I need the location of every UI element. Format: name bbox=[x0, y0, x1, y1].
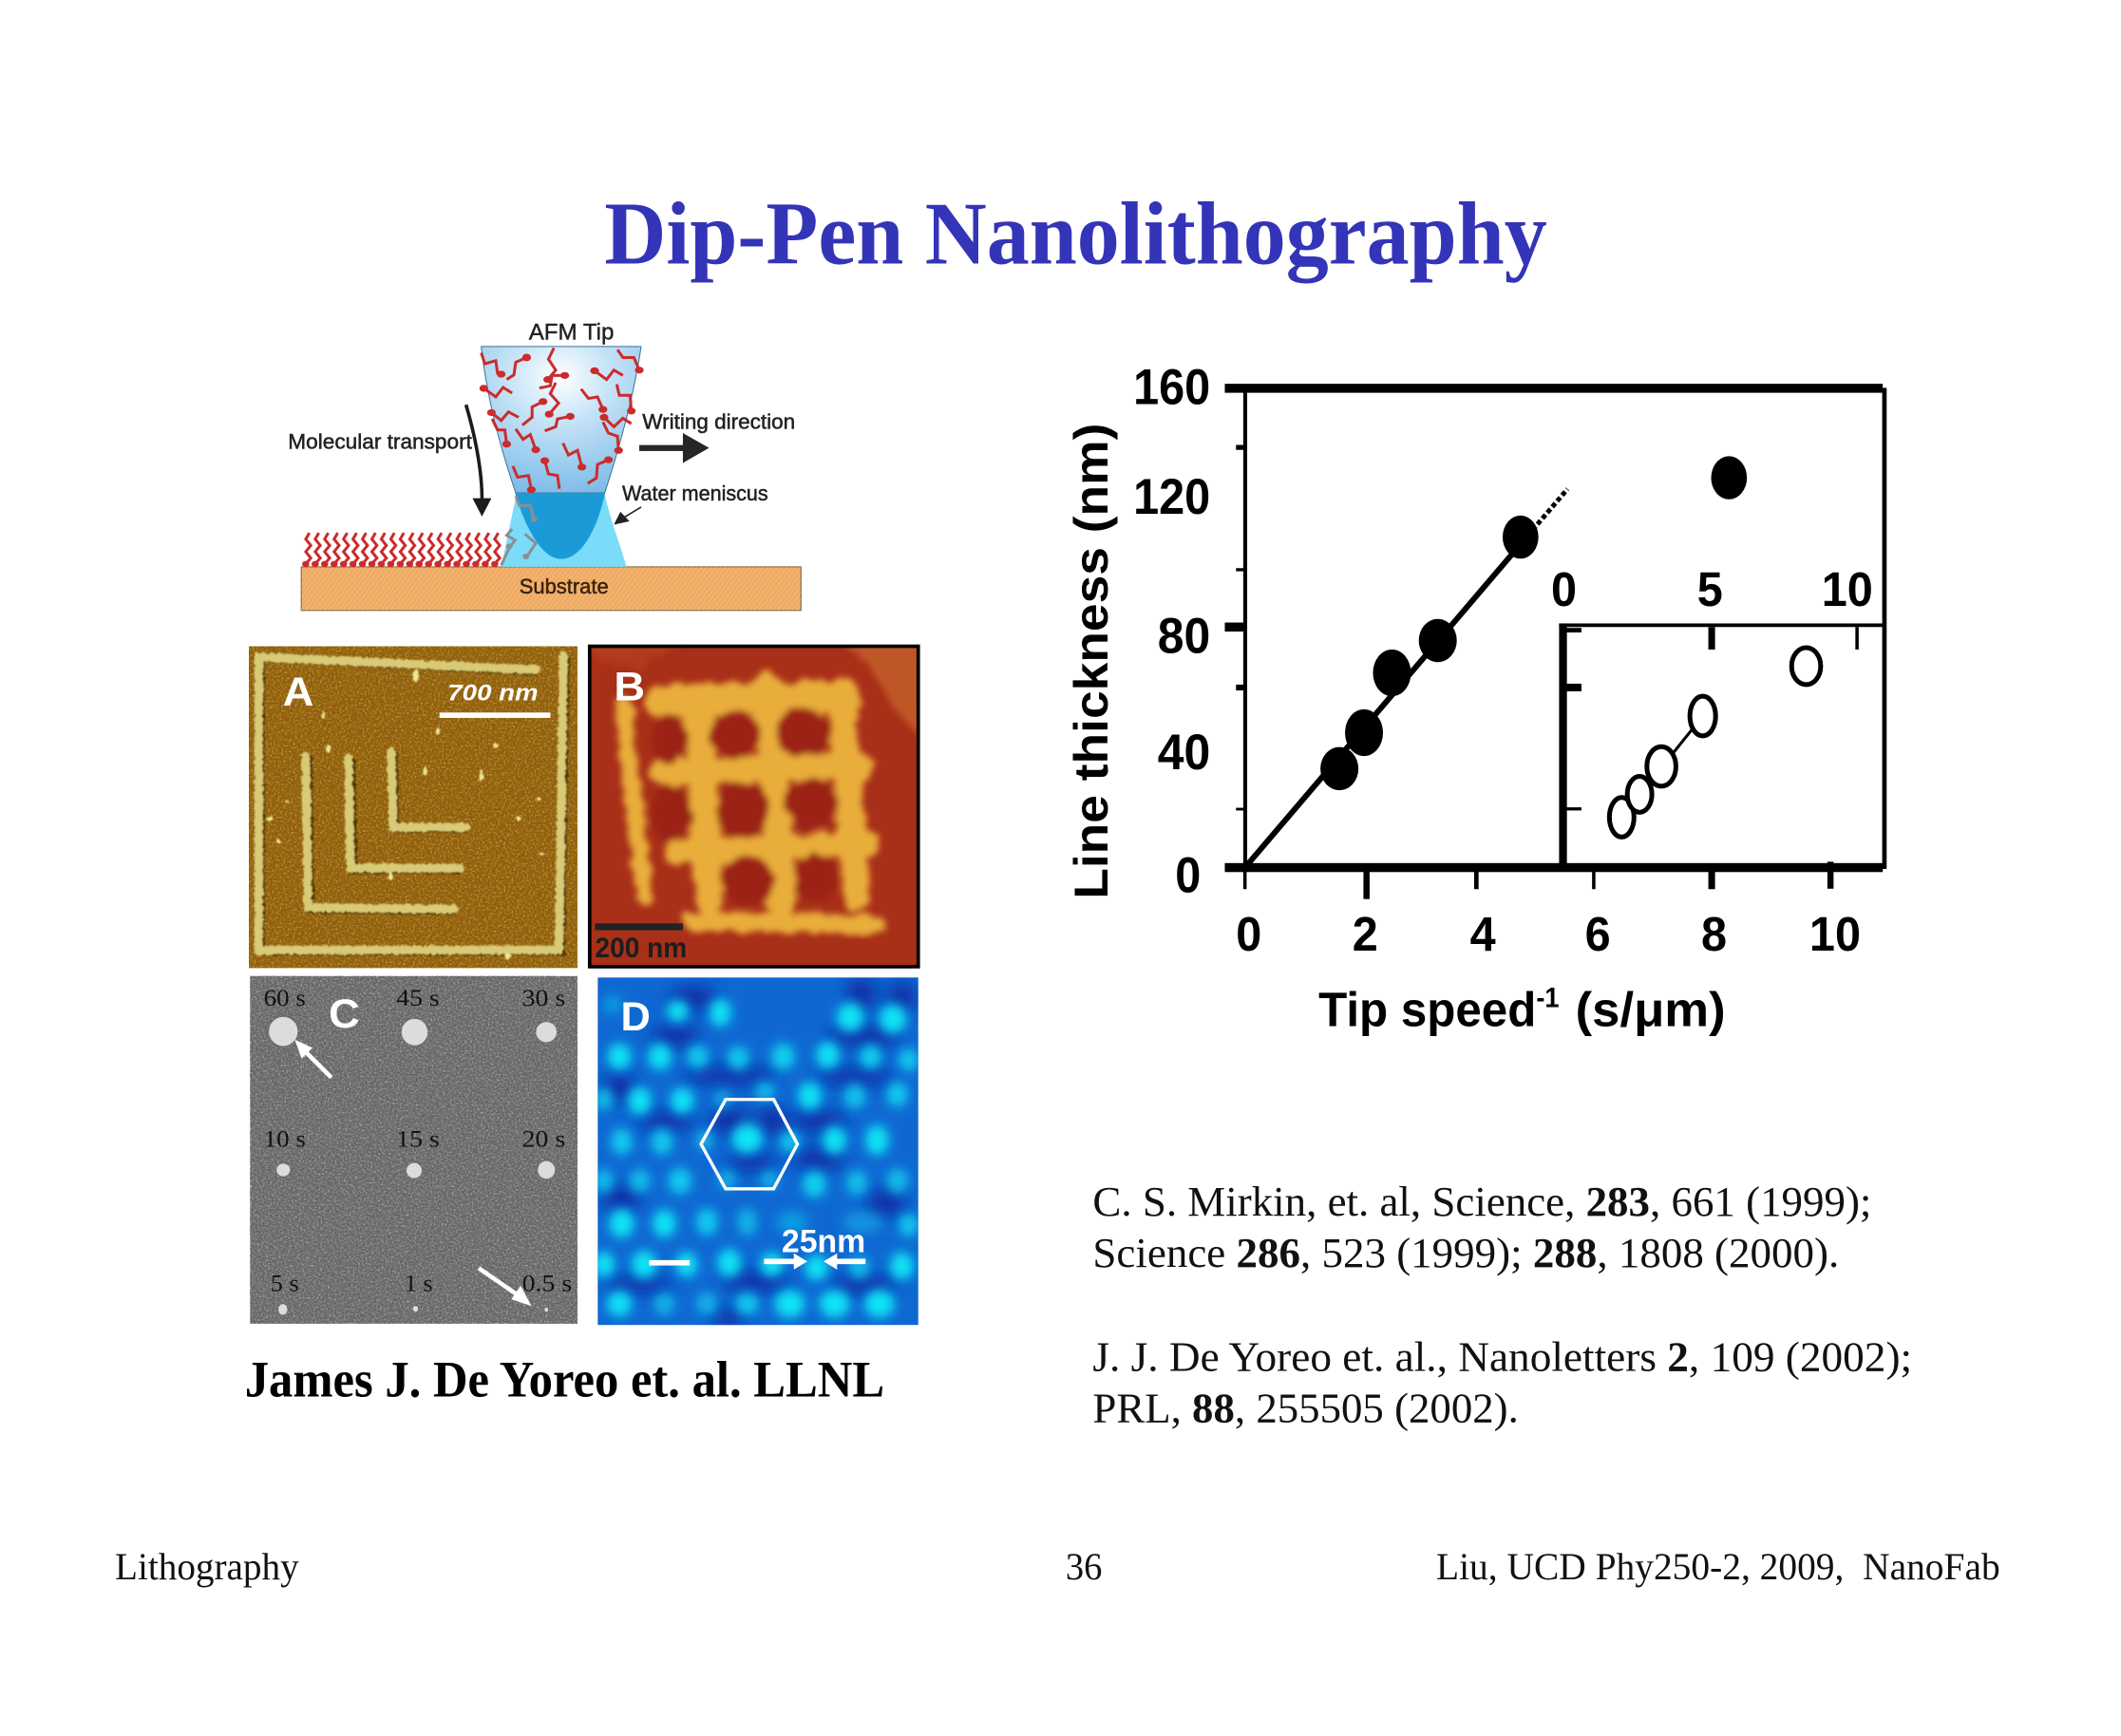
x tick labels bbox=[1236, 907, 1861, 961]
inset top labels: 0 bbox=[1551, 562, 1577, 616]
time labels: 15 s bbox=[396, 1124, 440, 1152]
bright lattice spots bbox=[593, 995, 918, 1317]
label: 25nm with arrows bbox=[764, 1223, 865, 1270]
y tick labels: 40 bbox=[1158, 725, 1210, 781]
inset frame bbox=[1559, 623, 1883, 864]
deposited monolayer bbox=[302, 533, 500, 567]
time labels: 10 s bbox=[264, 1124, 306, 1152]
inset line bbox=[1621, 716, 1703, 818]
x ticks bbox=[1243, 861, 1833, 899]
dark cells bbox=[650, 708, 837, 905]
surface specks bbox=[268, 670, 543, 959]
letter B: B bbox=[614, 664, 645, 709]
y tick labels: 160 bbox=[1133, 360, 1210, 416]
water meniscus bbox=[502, 495, 627, 567]
y ticks bbox=[1224, 445, 1245, 810]
x axis title: Tip speed bbox=[1318, 983, 1536, 1037]
time labels: 0.5 s bbox=[522, 1270, 572, 1297]
references: De Yoreo: J. J. De Yoreo et. al., Nanoletters 2, 109 (2002); bbox=[1092, 1334, 1912, 1381]
label: Writing direction: Writing direction bbox=[642, 409, 795, 433]
footer: section name: Lithography bbox=[115, 1545, 299, 1588]
arrow: water meniscus pointer bbox=[614, 507, 641, 524]
footer: course credit: Liu, UCD Phy250-2, 2009, NanoFab bbox=[1436, 1545, 2000, 1588]
x tick labels: 6 bbox=[1585, 907, 1611, 961]
pattern lines bbox=[258, 655, 566, 959]
dots bbox=[269, 1017, 557, 1314]
border bbox=[590, 647, 918, 967]
x axis title bbox=[1318, 983, 1726, 1037]
scale: 700 nm bbox=[440, 680, 550, 718]
panel B: AFM image of grid bbox=[590, 643, 922, 967]
arrow: writing direction bbox=[639, 433, 709, 463]
caption: James J. De Yoreo: James J. De Yoreo et. al. LLNL bbox=[245, 1351, 884, 1408]
y tick labels bbox=[1133, 360, 1210, 904]
time labels: 1 s bbox=[405, 1270, 433, 1297]
inset top labels bbox=[1551, 562, 1873, 616]
chart axes and data bbox=[1224, 384, 1886, 899]
letter D: D bbox=[621, 994, 651, 1040]
panel A: AFM image of nested L lines bbox=[249, 647, 578, 968]
references: De Yoreo: PRL, 88, 255505 (2002). bbox=[1092, 1386, 1519, 1432]
scale: 200 nm: 200 nm bbox=[595, 933, 687, 964]
references: Mirkin bbox=[1092, 1179, 1871, 1276]
letter C: C bbox=[329, 991, 360, 1037]
chart: line thickness vs inverse tip speed bbox=[1065, 360, 1886, 1037]
x axis title: -1 bbox=[1536, 983, 1560, 1014]
label: Molecular transport: Molecular transport bbox=[288, 430, 472, 454]
main frame bbox=[1224, 384, 1886, 872]
y tick labels: 80 bbox=[1158, 609, 1210, 665]
references: Mirkin: C. S. Mirkin, et. al, Science, 283, 661 (1999); bbox=[1092, 1179, 1871, 1225]
label: Substrate: Substrate bbox=[520, 575, 609, 598]
x axis title: (s/μm) bbox=[1576, 983, 1726, 1037]
scale bar bbox=[649, 1260, 690, 1266]
x tick labels: 4 bbox=[1470, 907, 1496, 961]
arrow to large dot bbox=[294, 1040, 331, 1078]
dark lattice spots bbox=[602, 978, 917, 1327]
panel D: molecular lattice image bbox=[593, 977, 918, 1327]
water inside tip bbox=[515, 493, 605, 559]
diagram: AFM tip dip-pen schematic bbox=[288, 319, 801, 611]
time labels bbox=[264, 984, 572, 1297]
references: Mirkin: Science 286, 523 (1999); 288, 1808 (2000). bbox=[1092, 1230, 1839, 1276]
ink molecules on tip bbox=[482, 349, 639, 490]
footer: page number: 36 bbox=[1066, 1545, 1102, 1588]
time labels: 20 s bbox=[522, 1124, 565, 1152]
label: AFM Tip: AFM Tip bbox=[529, 319, 614, 345]
x tick labels: 2 bbox=[1353, 907, 1378, 961]
title: Dip-Pen Nanolithography bbox=[604, 185, 1547, 284]
hexagon overlay bbox=[701, 1100, 798, 1189]
y tick labels: 0 bbox=[1175, 848, 1201, 904]
inset top labels: 10 bbox=[1822, 562, 1873, 616]
references: De Yoreo bbox=[1092, 1334, 1912, 1432]
filled data points bbox=[1320, 456, 1747, 790]
time labels: 30 s bbox=[522, 984, 565, 1011]
x tick labels: 0 bbox=[1236, 907, 1261, 961]
grey transported molecules bbox=[502, 496, 536, 565]
fit line bbox=[1245, 489, 1567, 868]
y tick labels: 120 bbox=[1133, 469, 1210, 525]
substrate bbox=[301, 567, 801, 611]
label: 25nm with arrows: 25nm bbox=[782, 1223, 865, 1259]
time labels: 60 s bbox=[264, 984, 306, 1011]
scale: 700 nm: 700 nm bbox=[447, 680, 539, 706]
time labels: 45 s bbox=[396, 984, 440, 1011]
x tick labels: 8 bbox=[1701, 907, 1727, 961]
inset open points bbox=[1609, 648, 1821, 837]
inset top labels: 5 bbox=[1697, 562, 1723, 616]
label: Water meniscus: Water meniscus bbox=[622, 481, 768, 505]
letter A: A bbox=[283, 670, 313, 715]
diagram shapes bbox=[301, 347, 801, 611]
x tick labels: 10 bbox=[1809, 907, 1861, 961]
arrow to smallest dot bbox=[479, 1268, 532, 1306]
time labels: 5 s bbox=[271, 1270, 299, 1297]
panel C: dot array with dwell times bbox=[250, 976, 578, 1324]
y axis title: Line thickness (nm) bbox=[1065, 424, 1118, 899]
AFM tip body bbox=[482, 347, 641, 493]
arrow: molecular transport bbox=[466, 405, 491, 517]
